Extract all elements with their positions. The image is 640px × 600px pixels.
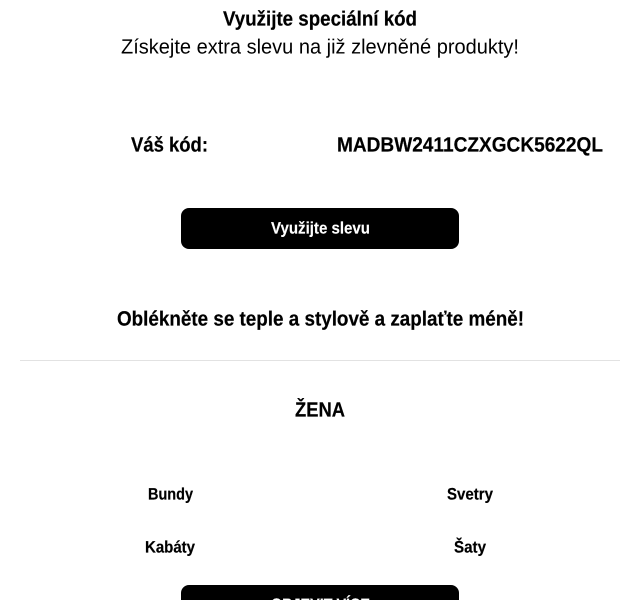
heading: special code: Využijte speciální kód [223, 8, 417, 30]
button: use discount: Využijte slevu [271, 218, 370, 238]
heading: dress warm and pay less: Oblékněte se teple a stylově a zaplaťte méně! [117, 308, 524, 330]
category link: sweaters: Svetry [447, 484, 494, 504]
category link: dresses: Šaty [454, 538, 487, 556]
text: extra discount subtitle: Získejte extra slevu na již zlevněné produkty! [121, 36, 519, 58]
label: your code: Váš kód: [131, 134, 208, 156]
button: discover more [181, 585, 459, 600]
heading: women: ŽENA [295, 398, 345, 422]
category link: coats: Kabáty [145, 538, 196, 556]
button: use discount [181, 208, 459, 249]
category link: jackets: Bundy [148, 484, 194, 504]
discount code value: MADBW2411CZXGCK5622QL [337, 134, 603, 156]
